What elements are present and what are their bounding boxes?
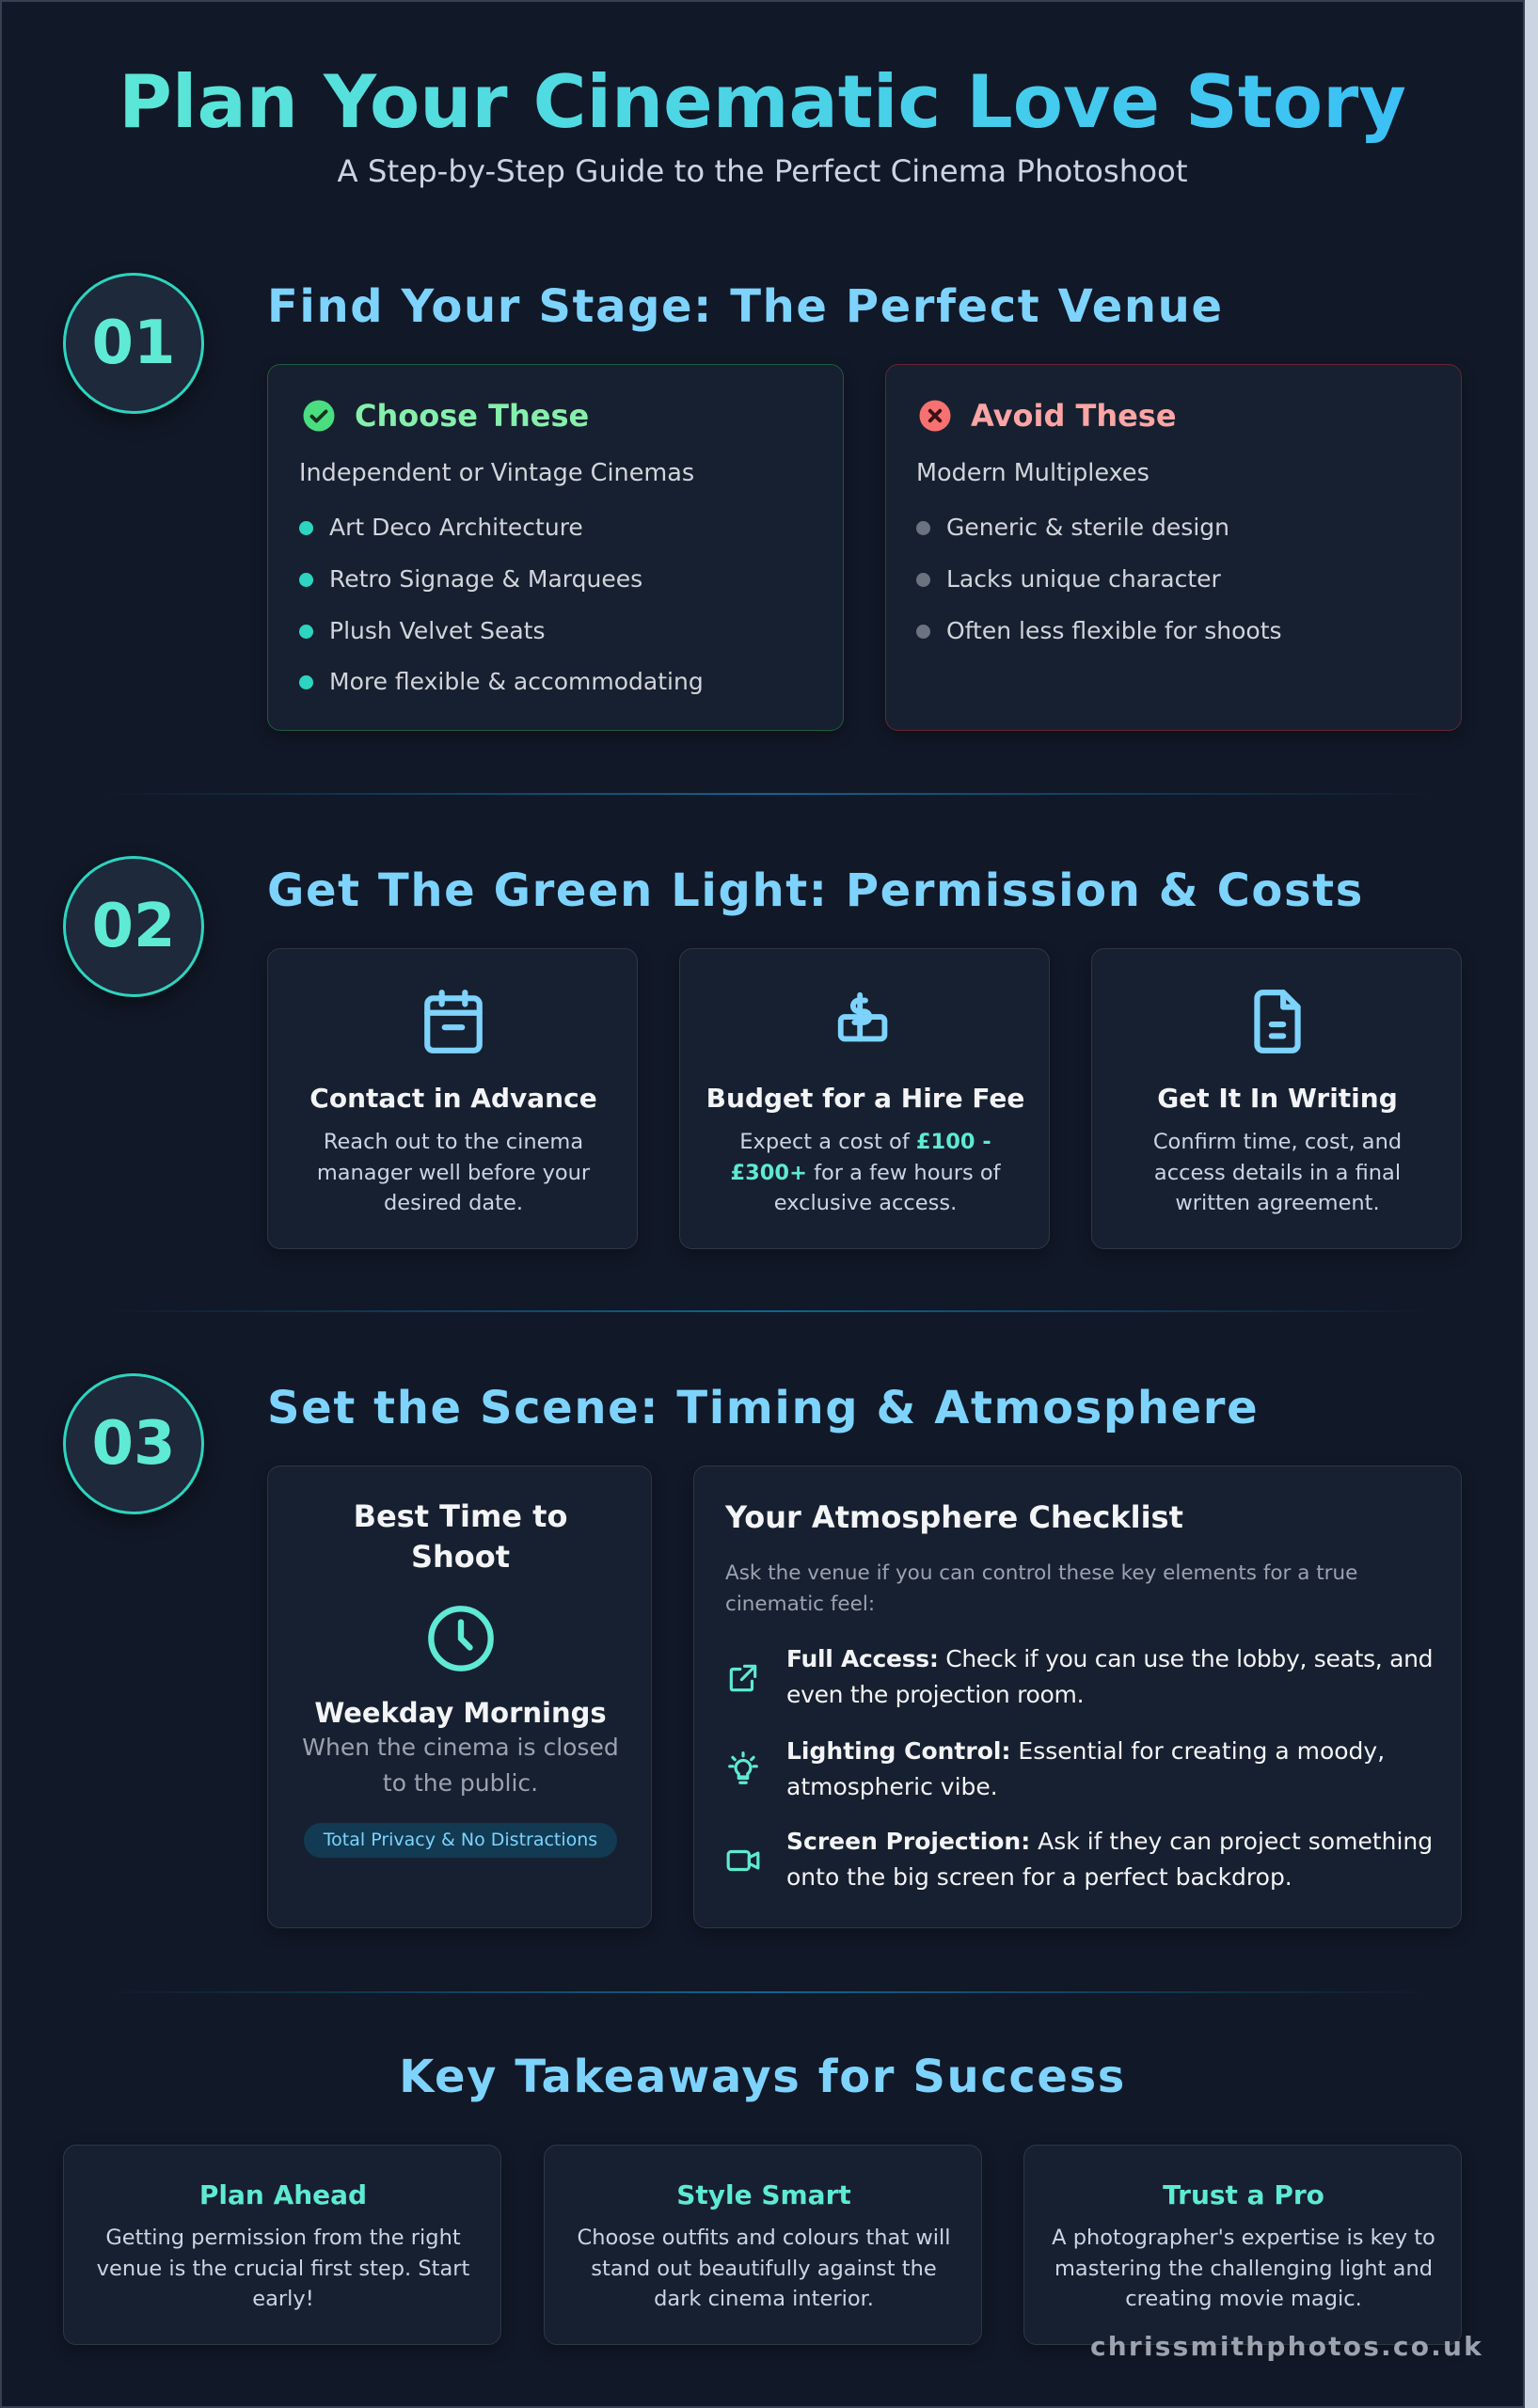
- subtitle: A Step-by-Step Guide to the Perfect Cinema Photoshoot: [337, 153, 1188, 189]
- panel: plan ahead: Getting permission from the right venue is the crucial first step. Start early!: [97, 2226, 469, 2311]
- list: avoid items: Often less flexible for shoots: [946, 617, 1282, 644]
- heading: avoid these: Avoid These: [971, 398, 1177, 434]
- panel: style smart: Choose outfits and colours that will stand out beautifully against the dark cinema interior.: [578, 2226, 950, 2311]
- panel: style smart: [544, 2145, 982, 2345]
- step badge 03: [63, 1373, 204, 1514]
- heading: key takeaways: Key Takeaways for Success: [399, 2051, 1126, 2103]
- pill: [304, 1823, 617, 1858]
- icon: calendar: [424, 990, 483, 1054]
- step badge 03: 03: [91, 1409, 176, 1479]
- card text: Reach out to the cinema manager well before your desired date.: [317, 1130, 590, 1215]
- icon: video: [726, 1849, 760, 1872]
- icon: bulb: [728, 1751, 758, 1784]
- list: avoid items: Generic & sterile design: [946, 514, 1229, 541]
- panel: trust a pro: Trust a Pro: [1163, 2179, 1324, 2210]
- card text: Expect a cost of £100 - £300+ for a few hours of exclusive access.: [730, 1130, 1001, 1215]
- list: avoid items: Lacks unique character: [946, 565, 1221, 593]
- icon: check: [303, 401, 335, 431]
- text: multiplexes: Modern Multiplexes: [916, 459, 1150, 487]
- card title: [354, 1498, 567, 1575]
- panel: best time: [267, 1465, 652, 1928]
- list: choose items: Art Deco Architecture: [329, 514, 583, 541]
- icon: cross: [920, 401, 950, 431]
- subtitle: weekday mornings: Weekday Mornings: [314, 1697, 607, 1729]
- panel: style smart: Style Smart: [676, 2179, 851, 2210]
- heading: section 2: Get The Green Light: Permission & Costs: [267, 864, 1364, 917]
- title: Plan Your Cinematic Love Story: [119, 60, 1406, 145]
- item: lighting: Lighting Control: Essential for creating a moody, atmospheric vibe.: [786, 1737, 1385, 1800]
- panel: plan ahead: Plan Ahead: [199, 2179, 367, 2210]
- pill: Total Privacy & No Distractions: [324, 1830, 597, 1850]
- card title: Best Time to: [354, 1498, 567, 1534]
- icon: money: [837, 991, 888, 1042]
- panel: budget: [679, 948, 1050, 1249]
- card title: Get It In Writing: [1157, 1083, 1398, 1114]
- panel: avoid these: [885, 364, 1462, 731]
- item: full access: Full Access: Check if you can use the lobby, seats, and even the projection room.: [786, 1645, 1433, 1708]
- icon: clock: [428, 1606, 494, 1671]
- step badge 02: 02: [91, 892, 176, 961]
- panel: checklist: [693, 1465, 1462, 1928]
- card title: Contact in Advance: [309, 1083, 597, 1114]
- watermark: chrissmithphotos.co.uk: [1090, 2331, 1483, 2362]
- card title: Budget for a Hire Fee: [706, 1083, 1024, 1114]
- text: When the cinema is closed to the public.: [302, 1734, 619, 1797]
- heading: section 1: Find Your Stage: The Perfect Venue: [267, 280, 1224, 333]
- step badge 02: [63, 856, 204, 997]
- list: choose items: [299, 514, 704, 695]
- panel: trust a pro: [1023, 2145, 1462, 2345]
- panel: contact in advance: [267, 948, 638, 1249]
- panel: plan ahead: [63, 2145, 501, 2345]
- heading: section 3: Set the Scene: Timing & Atmosphere: [267, 1382, 1259, 1434]
- list: choose items: More flexible & accommodating: [329, 668, 704, 695]
- text: independent cinemas: Independent or Vintage Cinemas: [299, 459, 694, 487]
- list: choose items: Retro Signage & Marquees: [329, 565, 642, 593]
- heading: choose these: Choose These: [355, 398, 589, 434]
- list: avoid items: [916, 514, 1282, 644]
- panel: in writing: [1091, 948, 1462, 1249]
- list: choose items: Plush Velvet Seats: [329, 617, 546, 644]
- step badge 01: [63, 273, 204, 414]
- panel: trust a pro: A photographer's expertise is key to mastering the challenging light and creating movie magic.: [1052, 2226, 1435, 2311]
- step badge 01: 01: [91, 309, 176, 378]
- text: intro: Ask the venue if you can control these key elements for a true cinematic feel:: [725, 1561, 1357, 1616]
- card text: Confirm time, cost, and access details in a final written agreement.: [1153, 1130, 1402, 1215]
- icon: document: [1254, 990, 1301, 1054]
- item: screen projection: Screen Projection: Ask if they can project something onto the big screen for a perfect backdrop.: [786, 1828, 1433, 1891]
- panel: choose these: [267, 364, 844, 731]
- card title: Your Atmosphere Checklist: [725, 1499, 1183, 1535]
- icon: external link: [730, 1665, 756, 1691]
- card title: Shoot: [411, 1539, 510, 1575]
